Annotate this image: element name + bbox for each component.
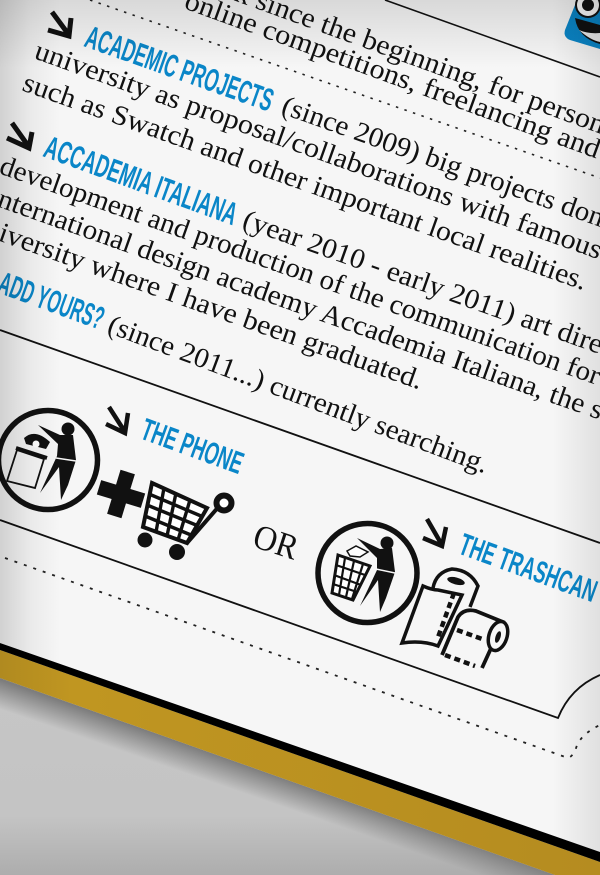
arrow bullet	[7, 123, 32, 148]
description: iversity where I have been graduated.	[0, 217, 427, 396]
top solid frame line	[385, 0, 600, 77]
blue monster icon	[565, 0, 600, 49]
icon: tidyman throwing trash	[318, 524, 417, 622]
academic projects entry	[19, 12, 600, 297]
add yours entry	[0, 265, 493, 480]
text: OR: OR	[249, 517, 304, 568]
background below the sheet	[0, 678, 555, 875]
heading: the phone: THE PHONE	[137, 412, 248, 481]
icon: paper towel and toilet rolls	[402, 569, 511, 668]
arrow bullet	[48, 12, 71, 36]
accademia italiana entry	[0, 123, 600, 426]
gold band with black edge	[0, 643, 600, 875]
description: (since 2011...) currently searching.	[104, 310, 493, 480]
top dotted line	[90, 0, 600, 178]
description: (year 2010 - early 2011) art dire	[239, 204, 600, 360]
icon: tidyman throwing phone	[0, 410, 98, 510]
description: (since 2009) big projects don	[278, 90, 600, 234]
lower dotted outline	[5, 558, 600, 758]
description: such as Swatch and other important local realities.	[19, 67, 591, 297]
description: nternational design academy Accademia Italiana, the s	[0, 183, 600, 426]
arrow: the trashcan	[423, 519, 446, 546]
icon: shopping cart	[138, 483, 232, 560]
description: development and production of the communication for	[0, 150, 600, 392]
icon: plus sign	[92, 465, 150, 523]
heading: accademia italiana: ACCADEMIA ITALIANA	[40, 129, 243, 232]
lower panel frame	[0, 330, 600, 718]
arrow: the phone	[106, 407, 128, 433]
description: university as proposal/collaborations with famous	[31, 35, 600, 266]
heading: academic projects: ACADEMIC PROJECTS	[81, 19, 278, 118]
